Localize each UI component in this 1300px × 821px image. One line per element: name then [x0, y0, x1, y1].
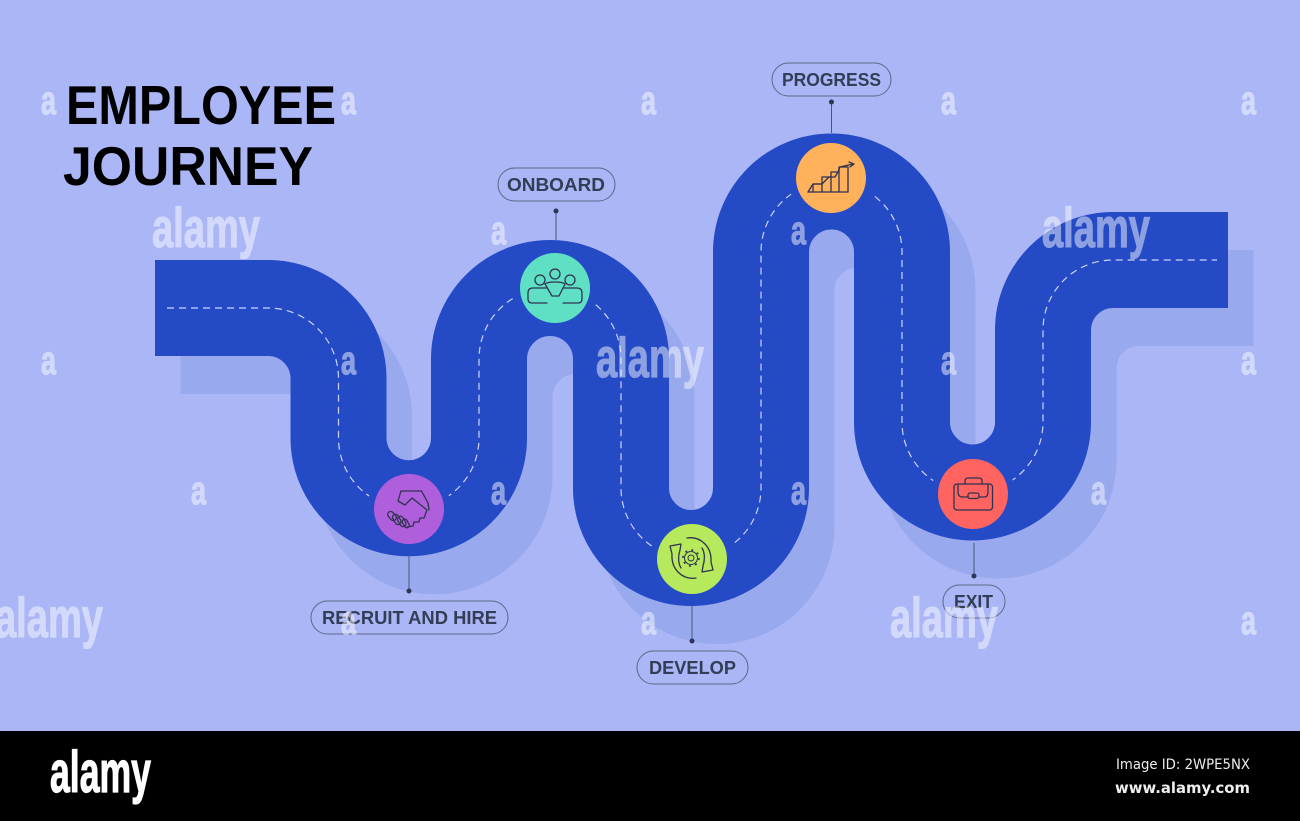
step: exit	[931, 452, 1015, 618]
small watermarks: a	[941, 79, 957, 123]
small watermarks: a	[1091, 469, 1107, 513]
small watermarks: a	[791, 469, 807, 513]
small watermarks: a	[341, 339, 357, 383]
small watermarks: a	[491, 469, 507, 513]
title: JOURNEY	[63, 135, 313, 197]
small watermarks: a	[1241, 339, 1257, 383]
small watermarks: a	[491, 209, 507, 253]
road centre dashed line	[167, 181, 1217, 558]
icon: team	[528, 269, 582, 303]
winding road	[155, 181, 1228, 558]
small watermarks: a	[341, 599, 357, 643]
footer bar	[0, 731, 1300, 821]
large watermarks: alamy	[1042, 196, 1150, 259]
small watermarks: a	[191, 469, 207, 513]
small watermarks: a	[941, 339, 957, 383]
large watermarks: alamy	[152, 196, 260, 259]
icon: briefcase	[954, 478, 992, 510]
step: exit: EXIT	[954, 591, 994, 612]
step: progress: PROGRESS	[782, 69, 881, 90]
icon: handshake	[386, 491, 429, 529]
large watermarks	[0, 196, 1150, 649]
small watermarks: a	[791, 209, 807, 253]
title: EMPLOYEE	[66, 74, 336, 136]
title	[63, 74, 336, 197]
small watermarks: a	[1241, 599, 1257, 643]
icon: rising bar chart	[808, 162, 854, 192]
step: develop: DEVELOP	[649, 657, 736, 678]
small watermarks: a	[641, 79, 657, 123]
footer bar: www.alamy.com	[1115, 779, 1250, 797]
step: recruit and hire	[311, 467, 508, 634]
small watermarks: a	[41, 339, 57, 383]
large watermarks: alamy	[890, 586, 998, 649]
small watermarks	[41, 79, 1257, 643]
footer bar: Image ID: 2WPE5NX	[1116, 757, 1250, 773]
small watermarks: a	[641, 599, 657, 643]
small watermarks: a	[341, 79, 357, 123]
footer bar: alamy	[50, 740, 151, 805]
step: onboard: ONBOARD	[507, 174, 605, 195]
step: recruit and hire: RECRUIT AND HIRE	[322, 607, 497, 628]
step: onboard	[498, 168, 615, 330]
icon: gear and cycle arrows	[670, 538, 713, 578]
small watermarks: a	[41, 79, 57, 123]
road drop shadow	[180, 219, 1254, 596]
step: develop	[637, 518, 748, 684]
large watermarks: alamy	[596, 326, 704, 389]
small watermarks: a	[1241, 79, 1257, 123]
step: progress	[772, 63, 891, 221]
